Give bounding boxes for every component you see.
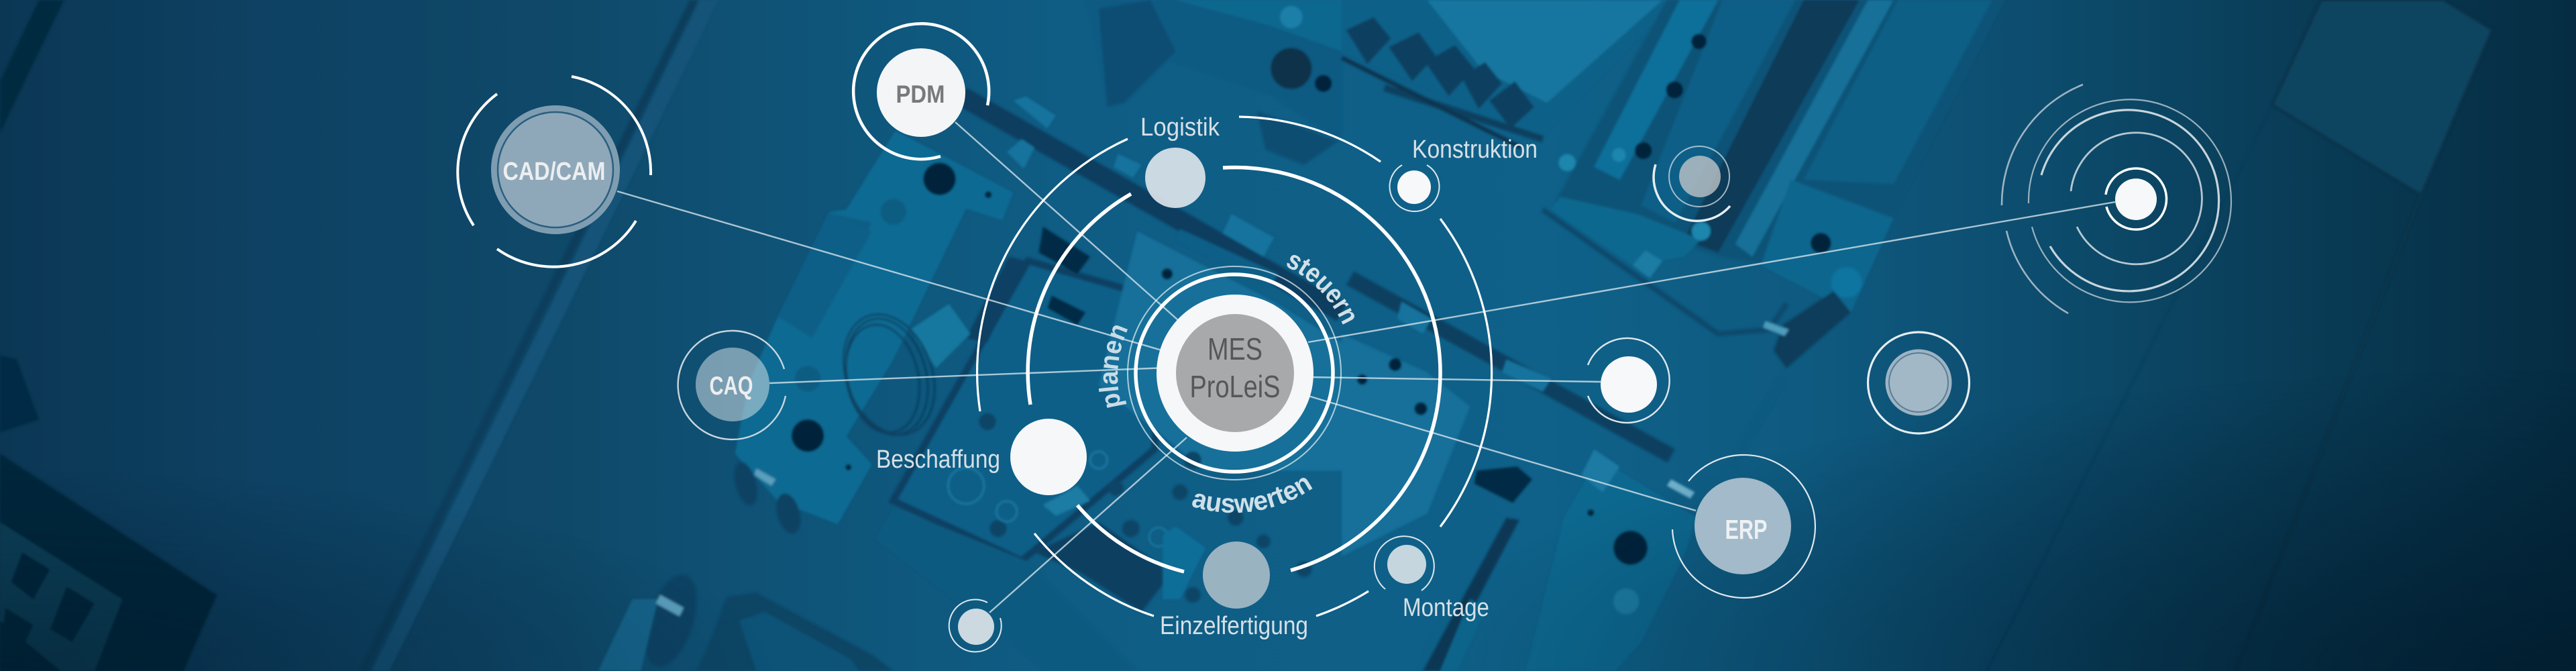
node: Beschaffung <box>876 419 1087 495</box>
curved label: planen: planen <box>1099 325 1128 408</box>
node: unlabeled lower left <box>949 599 1002 652</box>
node: Montage <box>1375 536 1489 622</box>
node: Konstruktion: Konstruktion <box>1412 136 1538 164</box>
node: CAD/CAM <box>458 76 651 267</box>
node: Logistik <box>1140 113 1220 208</box>
node: Konstruktion <box>1390 136 1538 211</box>
node: radar target <box>2002 85 2231 313</box>
curved label: auswerten: auswerten <box>1192 478 1312 513</box>
lower machine parts <box>696 592 894 671</box>
connector lines from MES to the nodes <box>617 122 2115 613</box>
node: gray with outer ring <box>1868 332 1970 433</box>
central node: MES ProLeiS: ProLeiS <box>1190 369 1280 404</box>
central node: MES ProLeiS <box>1157 295 1313 452</box>
node: upper machine semi-transparent <box>1654 146 1730 221</box>
central node: MES ProLeiS: MES <box>1208 331 1263 366</box>
node: Montage: Montage <box>1403 594 1489 622</box>
node: Logistik: Logistik <box>1140 113 1220 142</box>
node: Einzelfertigung <box>1160 541 1308 640</box>
node: right white with ring <box>1588 338 1670 423</box>
node: Einzelfertigung: Einzelfertigung <box>1160 612 1308 640</box>
central ring system <box>977 117 1492 616</box>
node: CAD/CAM: CAD/CAM <box>503 158 605 186</box>
node: Beschaffung: Beschaffung <box>876 446 1000 474</box>
node: CAQ <box>678 331 786 440</box>
node: CAQ: CAQ <box>710 372 753 401</box>
curved label: steuern: steuern <box>1287 255 1354 325</box>
node: ERP <box>1672 455 1815 598</box>
node: PDM: PDM <box>896 81 945 108</box>
node: PDM <box>853 23 989 159</box>
node: ERP: ERP <box>1725 514 1767 545</box>
